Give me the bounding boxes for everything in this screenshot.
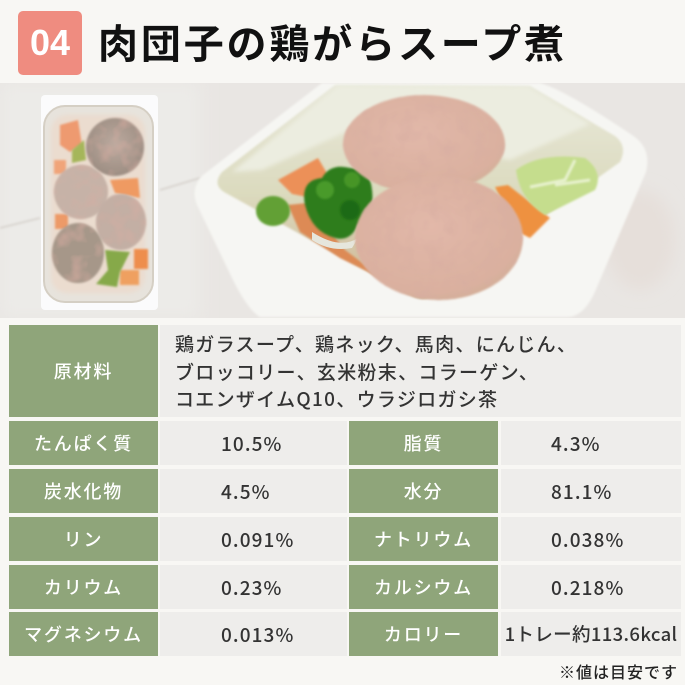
row: ingredients	[9, 325, 681, 417]
value: phosphorus: 0.091%	[221, 526, 294, 552]
label: カロリー: カロリー	[384, 621, 463, 647]
title: 肉団子の鶏がらスープ煮	[98, 12, 567, 70]
label: ナトリウム: ナトリウム	[374, 526, 473, 552]
value: water: 81.1%	[551, 478, 612, 504]
spec table	[0, 318, 685, 685]
value: potassium	[160, 565, 347, 609]
header band	[0, 0, 685, 83]
label: 原材料: 原材料	[54, 358, 113, 384]
value: sodium: 0.038%	[551, 526, 624, 552]
label: たんぱく質	[9, 421, 158, 465]
label: たんぱく質: たんぱく質	[34, 430, 133, 456]
ingredients text: コエンザイムQ10、ウラジロガシ茶	[175, 385, 498, 412]
label: カルシウム	[349, 565, 498, 609]
value: calcium: 0.218%	[551, 574, 624, 600]
label: 原材料	[9, 325, 158, 417]
top meatball	[343, 95, 505, 193]
label: リン: リン	[64, 526, 103, 552]
value: magnesium	[160, 612, 347, 656]
label: ナトリウム	[349, 517, 498, 561]
value: potassium: 0.23%	[221, 574, 282, 600]
value: fat	[501, 421, 681, 465]
label: カロリー	[349, 612, 498, 656]
product tray	[41, 95, 158, 310]
value: carbohydrate	[160, 469, 347, 513]
front meatball	[355, 176, 523, 300]
ingredients text	[160, 325, 681, 417]
label: カルシウム: カルシウム	[374, 574, 473, 600]
bowl	[195, 83, 647, 317]
value: water	[501, 469, 681, 513]
label: 炭水化物: 炭水化物	[44, 478, 123, 504]
ingredients text: ブロッコリー、玄米粉末、コラーゲン、	[175, 358, 539, 384]
footnote: ※値は目安です	[559, 659, 678, 683]
value: magnesium: 0.013%	[221, 620, 294, 648]
label: 脂質	[349, 421, 498, 465]
value: calories: 1トレー約113.6kcal	[505, 621, 677, 647]
value: protein	[160, 421, 347, 465]
value: fat: 4.3%	[551, 430, 601, 456]
value: calories	[501, 612, 681, 656]
number badge	[18, 11, 82, 75]
label: 炭水化物	[9, 469, 158, 513]
value: sodium	[501, 517, 681, 561]
value: protein: 10.5%	[221, 430, 282, 456]
number badge: 04	[30, 22, 70, 63]
value: carbohydrate: 4.5%	[221, 478, 271, 504]
value: phosphorus	[160, 517, 347, 561]
label: リン	[9, 517, 158, 561]
ingredients text: 鶏ガラスープ、鶏ネック、馬肉、にんじん、	[175, 330, 577, 357]
photo: meatball soup in white bowl with product tray	[0, 83, 685, 318]
label: マグネシウム: マグネシウム	[24, 621, 143, 647]
label: 水分	[349, 469, 498, 513]
soup ingredients	[256, 156, 598, 280]
label: カリウム: カリウム	[44, 574, 123, 600]
label: カリウム	[9, 565, 158, 609]
label: マグネシウム	[9, 612, 158, 656]
value: calcium	[501, 565, 681, 609]
table background	[0, 83, 685, 318]
label: 水分: 水分	[404, 478, 443, 504]
label: 脂質: 脂質	[404, 430, 443, 456]
